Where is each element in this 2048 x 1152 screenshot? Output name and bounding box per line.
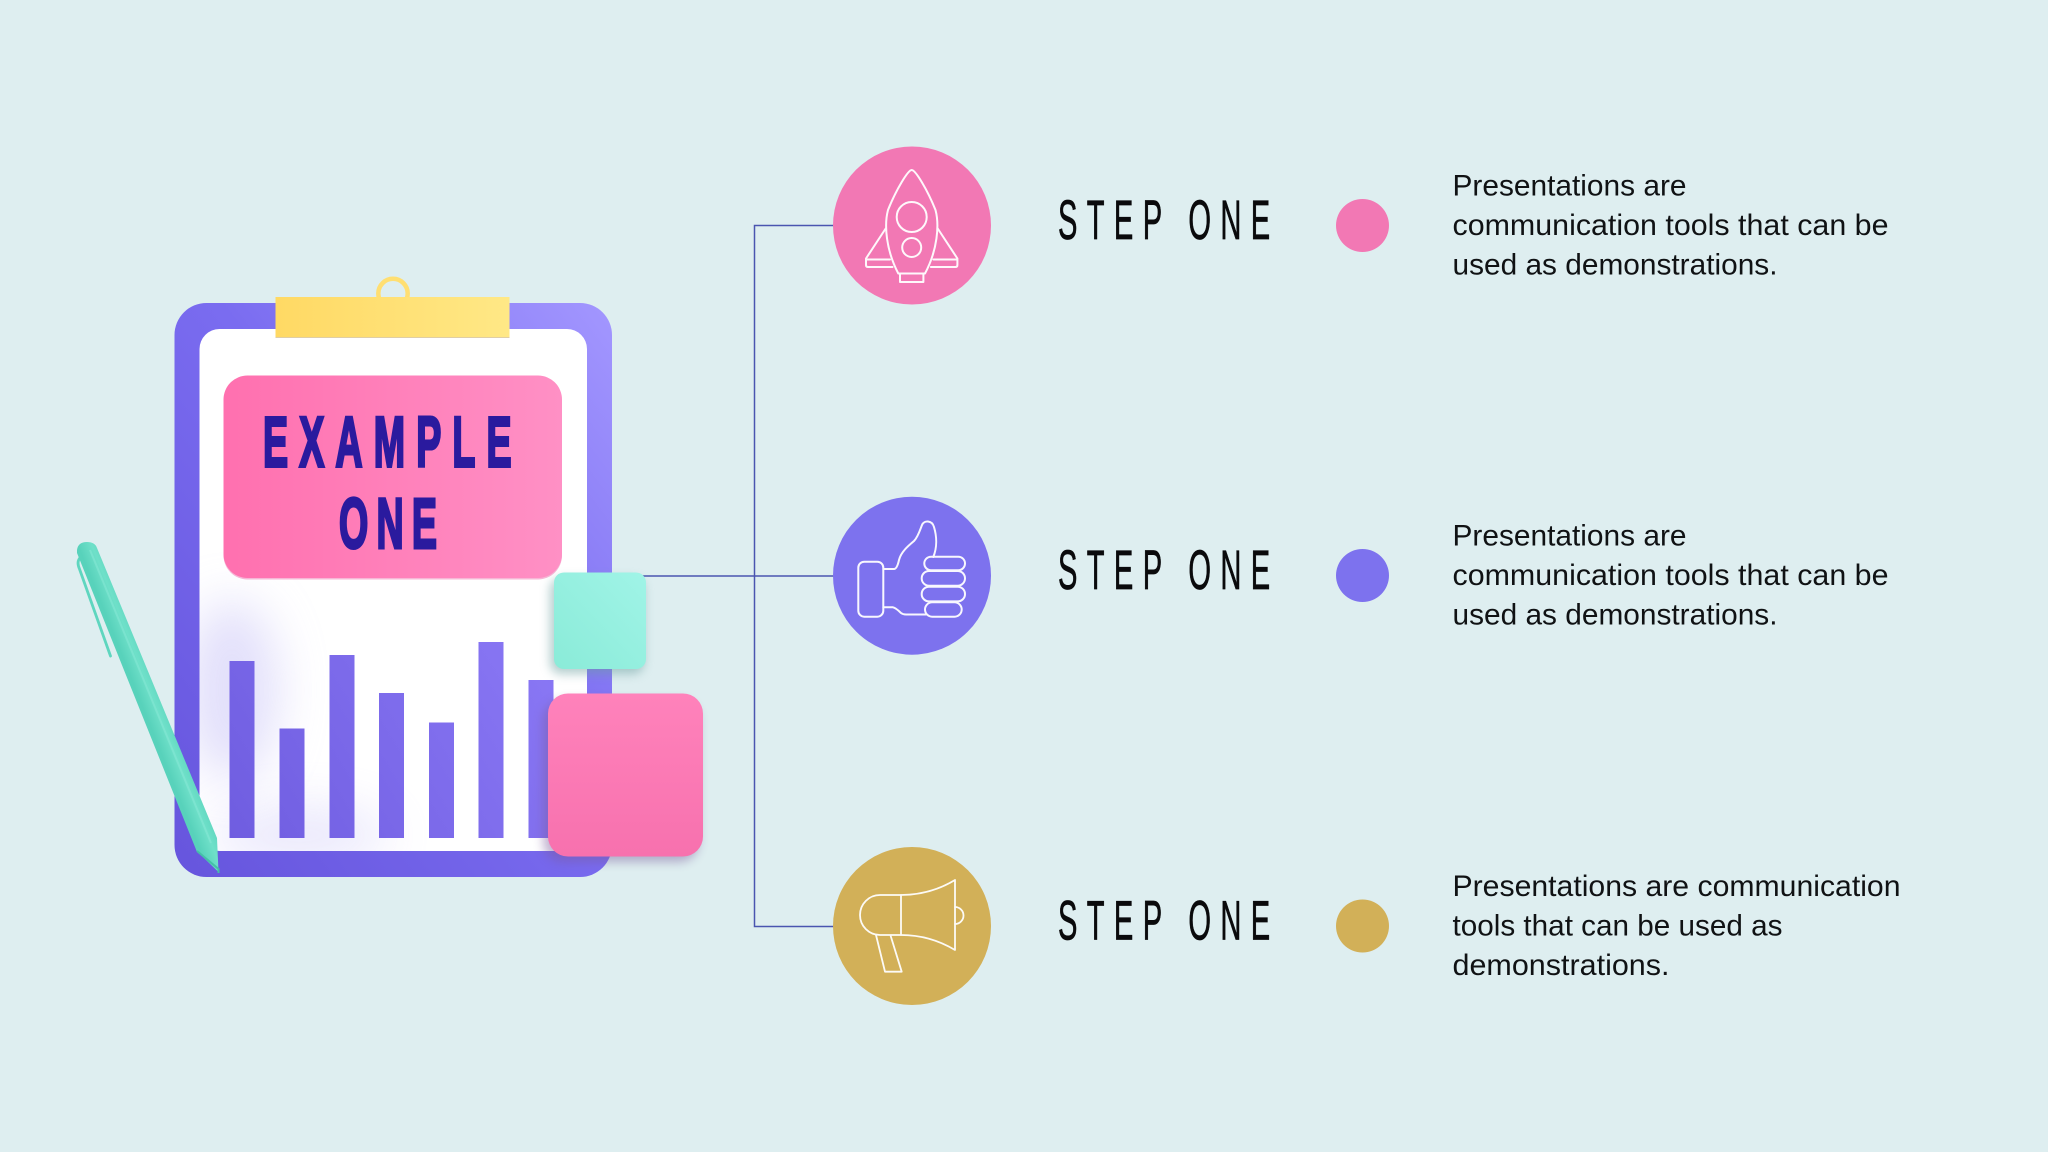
title text	[263, 404, 523, 564]
bar chart	[230, 642, 554, 838]
description: tools that can be used as	[1452, 910, 1782, 942]
clipboard paper	[186, 329, 587, 863]
clip ring	[378, 279, 408, 308]
pink sticky note	[543, 694, 703, 862]
title card	[224, 376, 562, 580]
description: used as demonstrations.	[1452, 248, 1778, 282]
description	[1452, 870, 1900, 982]
clip bar	[276, 297, 510, 338]
illustration: clipboard	[77, 279, 703, 877]
title text: EXAMPLE	[263, 404, 523, 483]
step 3 row	[833, 847, 1900, 1005]
teal sticky note	[550, 572, 646, 674]
colour dot	[1336, 900, 1389, 952]
description: demonstrations.	[1452, 949, 1670, 982]
title text: ONE	[339, 486, 445, 564]
icon circle: thumbs up	[833, 497, 991, 655]
pen	[77, 542, 218, 873]
step label: STEP ONE	[1058, 540, 1280, 602]
colour dot	[1336, 549, 1389, 602]
step label: STEP ONE	[1058, 190, 1280, 252]
description: used as demonstrations.	[1452, 598, 1778, 632]
description: communication tools that can be	[1452, 209, 1888, 242]
description: communication tools that can be	[1452, 559, 1888, 592]
clipboard board	[174, 303, 612, 877]
description: Presentations are	[1452, 170, 1686, 202]
step 1 row	[833, 146, 1888, 304]
step label: STEP ONE	[1058, 891, 1280, 952]
icon circle: megaphone	[833, 847, 991, 1005]
description: Presentations are communication	[1452, 870, 1900, 903]
description	[1452, 520, 1888, 632]
description	[1452, 170, 1888, 282]
connector lines	[640, 226, 834, 926]
step 2 row	[833, 497, 1888, 655]
icon circle: rocket	[833, 146, 991, 304]
colour dot	[1336, 199, 1389, 252]
description: Presentations are	[1452, 520, 1686, 552]
